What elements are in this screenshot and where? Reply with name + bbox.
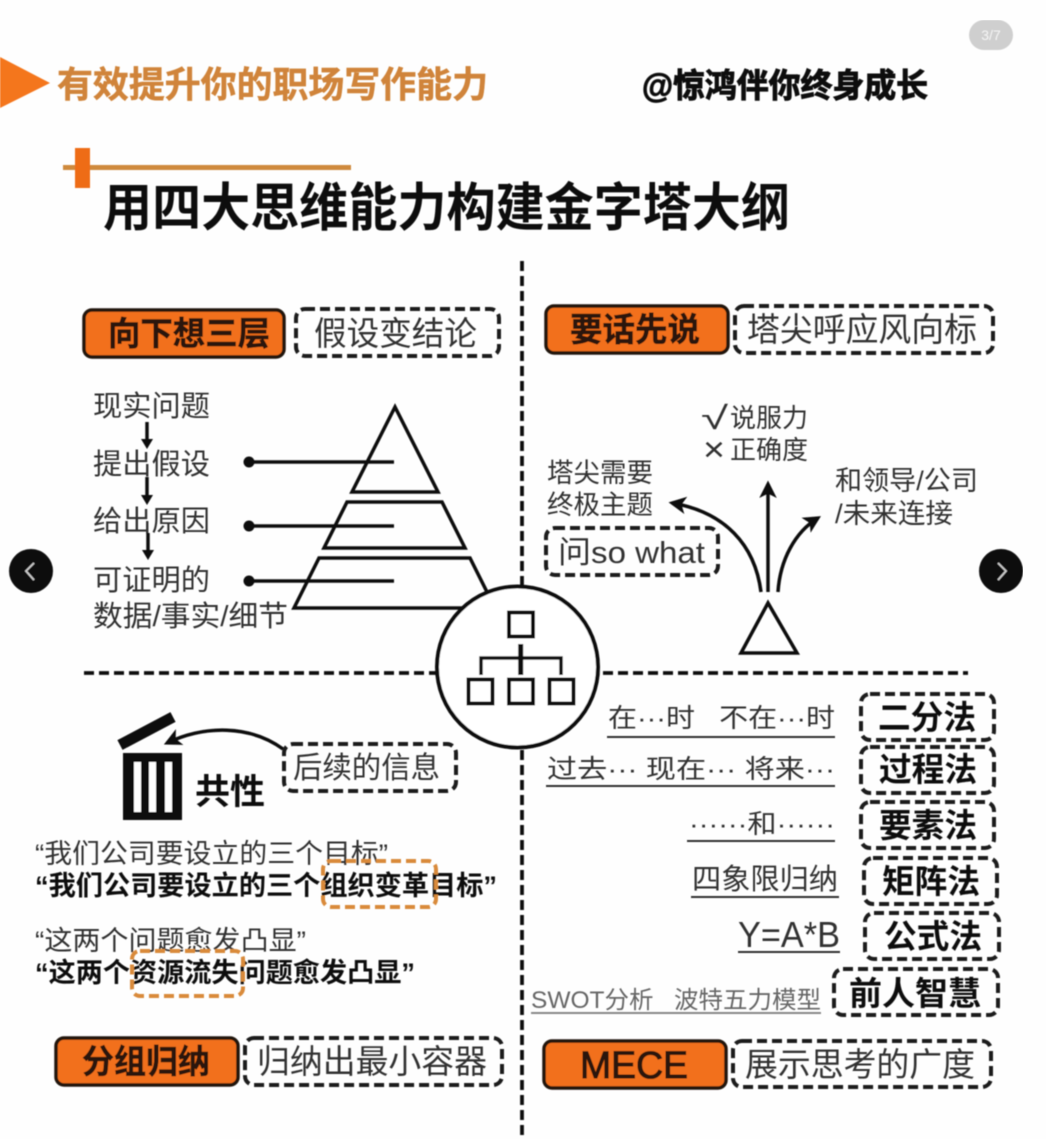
label: 共性: 共性 xyxy=(195,773,265,812)
row: 矩阵法 xyxy=(691,858,997,904)
dashed tag: 后续的信息 xyxy=(284,744,456,791)
row: 公式法 xyxy=(738,913,999,959)
dashed tag: 问so what xyxy=(546,528,718,575)
panel: MECE xyxy=(531,694,999,1088)
tag: 向下想三层: 向下想三层 xyxy=(108,315,270,352)
panel: 分组归纳 xyxy=(35,717,502,1085)
flow steps: 数据/事实/细节 xyxy=(93,600,288,633)
label: 说服力 正确度: × xyxy=(703,431,725,469)
tag: 分组归纳 xyxy=(56,1038,238,1085)
label: 说服力 正确度 xyxy=(701,400,808,469)
dashed tag: 展示思考的广度: 展示思考的广度 xyxy=(745,1046,975,1083)
nav button: previous xyxy=(9,549,53,593)
page badge xyxy=(969,20,1013,50)
label: 说服力 正确度: 正确度 xyxy=(730,435,808,465)
small triangle xyxy=(741,603,797,653)
row: 公式法: 公式法 xyxy=(884,918,982,955)
arrow to bin xyxy=(167,730,283,749)
label: 说服力 正确度: √ xyxy=(701,400,729,436)
row: 过程法 xyxy=(546,747,994,793)
icon: orange arrow xyxy=(0,57,50,108)
center icon: org chart circle xyxy=(437,586,598,748)
row: 要素法: 要素法 xyxy=(879,807,977,844)
banner title: 有效提升你的职场写作能力 xyxy=(57,64,488,105)
highlight: 资源流失 xyxy=(132,951,243,996)
flow steps xyxy=(93,390,288,633)
label: 和领导/公司 未来连接: 和领导/公司 xyxy=(835,466,978,496)
dashed tag: 假设变结论: 假设变结论 xyxy=(314,315,477,352)
example sentences 2: “这两个问题愈发凸显” xyxy=(35,926,306,956)
icon: orange cross accent xyxy=(63,148,351,188)
quadrant dividers xyxy=(84,261,968,1139)
row: 要素法: ······和······ xyxy=(689,809,835,839)
dashed tag: 归纳出最小容器: 归纳出最小容器 xyxy=(257,1043,487,1080)
row: 过程法: 过去··· 现在··· 将来··· xyxy=(547,754,835,784)
tag: MECE: MECE xyxy=(580,1045,688,1087)
flow steps: 给出原因 xyxy=(93,505,210,538)
label: 和领导/公司 未来连接 xyxy=(835,466,978,529)
example sentences 1: “我们公司要设立的三个组织变革目标” xyxy=(35,871,497,901)
pointer lines xyxy=(244,456,394,586)
row: 二分法 xyxy=(607,694,994,740)
nav button: next xyxy=(979,549,1023,593)
row: 前人智慧: SWOT分析 波特五力模型 xyxy=(531,987,821,1014)
icon: trash bin xyxy=(120,717,182,820)
dashed tag: 假设变结论 xyxy=(296,309,499,356)
example sentences 2: “这两个资源流失问题愈发凸显” xyxy=(35,958,415,988)
row: 二分法: 二分法 xyxy=(878,699,976,736)
dashed tag: 问so what: 问so what xyxy=(558,535,705,570)
tag: 要话先说: 要话先说 xyxy=(570,311,700,348)
row: 要素法 xyxy=(687,802,994,848)
label: 塔尖需要终极主题: 终极主题 xyxy=(547,490,653,520)
label: 塔尖需要终极主题: 塔尖需要 xyxy=(547,458,653,488)
row: 前人智慧 xyxy=(531,969,998,1015)
arrows between steps xyxy=(141,422,154,560)
row: 二分法: 在···时 不在···时 xyxy=(608,703,835,733)
row: 过程法: 过程法 xyxy=(879,751,977,788)
heading text: 用四大思维能力构建金字塔大纲 xyxy=(103,180,790,238)
header banner xyxy=(0,57,928,108)
row: 公式法: Y=A*B xyxy=(738,914,840,955)
row: 前人智慧: 前人智慧 xyxy=(849,975,981,1012)
example sentences 1: “我们公司要设立的三个目标” xyxy=(35,839,388,869)
pyramid diagram xyxy=(294,407,487,608)
panel: 向下想三层 xyxy=(84,309,499,633)
dashed tag: 塔尖呼应风向标: 塔尖呼应风向标 xyxy=(747,311,977,348)
tag: 要话先说 xyxy=(546,306,728,353)
dashed tag: 后续的信息: 后续的信息 xyxy=(293,752,440,785)
example sentences 1 xyxy=(35,839,497,901)
tag: 向下想三层 xyxy=(84,310,284,357)
tag: MECE xyxy=(544,1041,726,1088)
label: 和领导/公司 未来连接: /未来连接 xyxy=(835,499,953,529)
row: 矩阵法: 四象限归纳 xyxy=(692,863,838,896)
main heading xyxy=(63,148,790,238)
example sentences 2 xyxy=(35,926,415,988)
row: 矩阵法: 矩阵法 xyxy=(882,863,980,900)
flow steps: 可证明的 xyxy=(93,564,210,597)
flow steps: 现实问题 xyxy=(93,390,210,423)
panel: 要话先说 xyxy=(546,306,993,653)
tag: 分组归纳: 分组归纳 xyxy=(82,1043,210,1080)
author handle: @惊鸿伴你终身成长 xyxy=(642,67,928,104)
highlight: 组织变革 xyxy=(323,861,436,907)
label: 塔尖需要终极主题 xyxy=(547,458,653,520)
three arrows xyxy=(672,484,818,592)
page badge: 3/7 xyxy=(981,27,1001,43)
flow steps: 提出假设 xyxy=(93,448,210,481)
label: 说服力 正确度: 说服力 xyxy=(730,403,808,433)
